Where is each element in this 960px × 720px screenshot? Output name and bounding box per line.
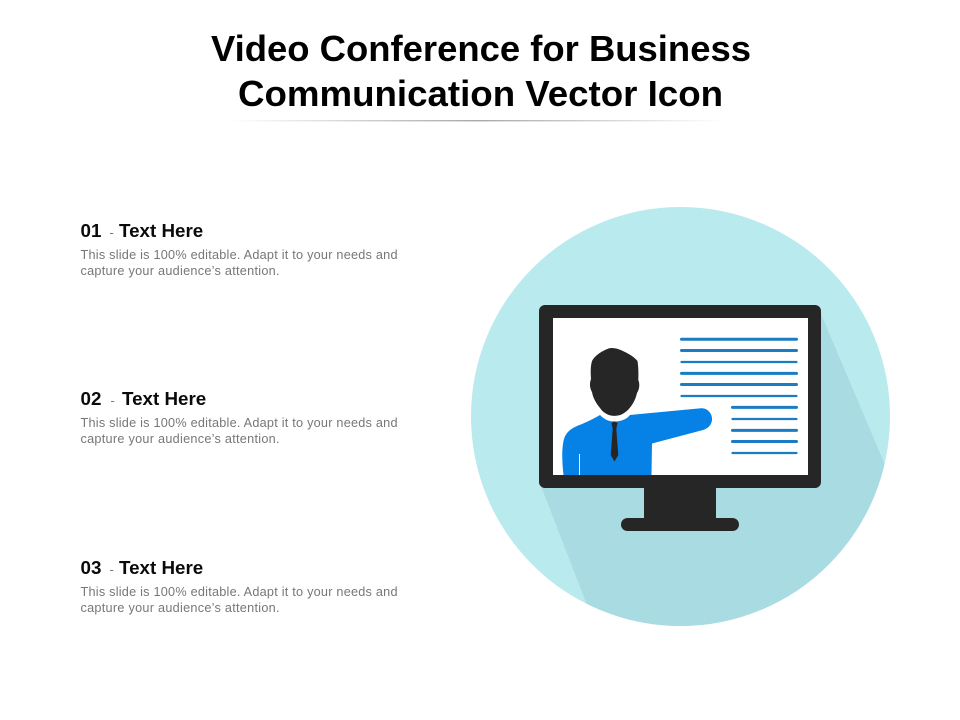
- title: Communication Vector Icon: [238, 73, 723, 114]
- text block 02: Text Here: [122, 388, 206, 409]
- text block 03: -: [110, 562, 114, 577]
- slide text lines: [682, 339, 796, 453]
- monitor stand: [644, 486, 716, 520]
- text block 01: -: [110, 225, 114, 240]
- text block 01: [80, 220, 398, 278]
- title: [211, 28, 751, 114]
- text block 02: This slide is 100% editable. Adapt it to your needs and: [80, 416, 398, 430]
- text block 03: capture your audience’s attention.: [80, 601, 280, 615]
- text block 01: Text Here: [119, 220, 203, 241]
- text block 03: 03: [80, 557, 101, 578]
- text block 02: -: [110, 393, 115, 408]
- background circle: [471, 207, 890, 626]
- text block 03: [80, 557, 398, 615]
- text block 01: This slide is 100% editable. Adapt it to your needs and: [80, 248, 398, 262]
- monitor frame: [539, 305, 821, 488]
- text block 03: This slide is 100% editable. Adapt it to your needs and: [80, 585, 398, 599]
- monitor screen: [553, 318, 808, 475]
- presenter head: [590, 348, 639, 416]
- text block 01: 01: [80, 220, 101, 241]
- text block 02: [80, 388, 398, 446]
- icon: video conference monitor in circle: [471, 207, 900, 640]
- long shadow: [541, 314, 900, 640]
- text block 01: capture your audience’s attention.: [80, 264, 280, 278]
- presenter body and pointing arm: [562, 408, 712, 475]
- title divider: [230, 120, 725, 121]
- shirt fold: [579, 454, 580, 475]
- presenter tie: [611, 422, 618, 462]
- title: Video Conference for Business: [211, 28, 751, 69]
- text block 02: 02: [80, 388, 101, 409]
- text block 02: capture your audience’s attention.: [80, 432, 280, 446]
- monitor base: [621, 518, 739, 531]
- text block 03: Text Here: [119, 557, 203, 578]
